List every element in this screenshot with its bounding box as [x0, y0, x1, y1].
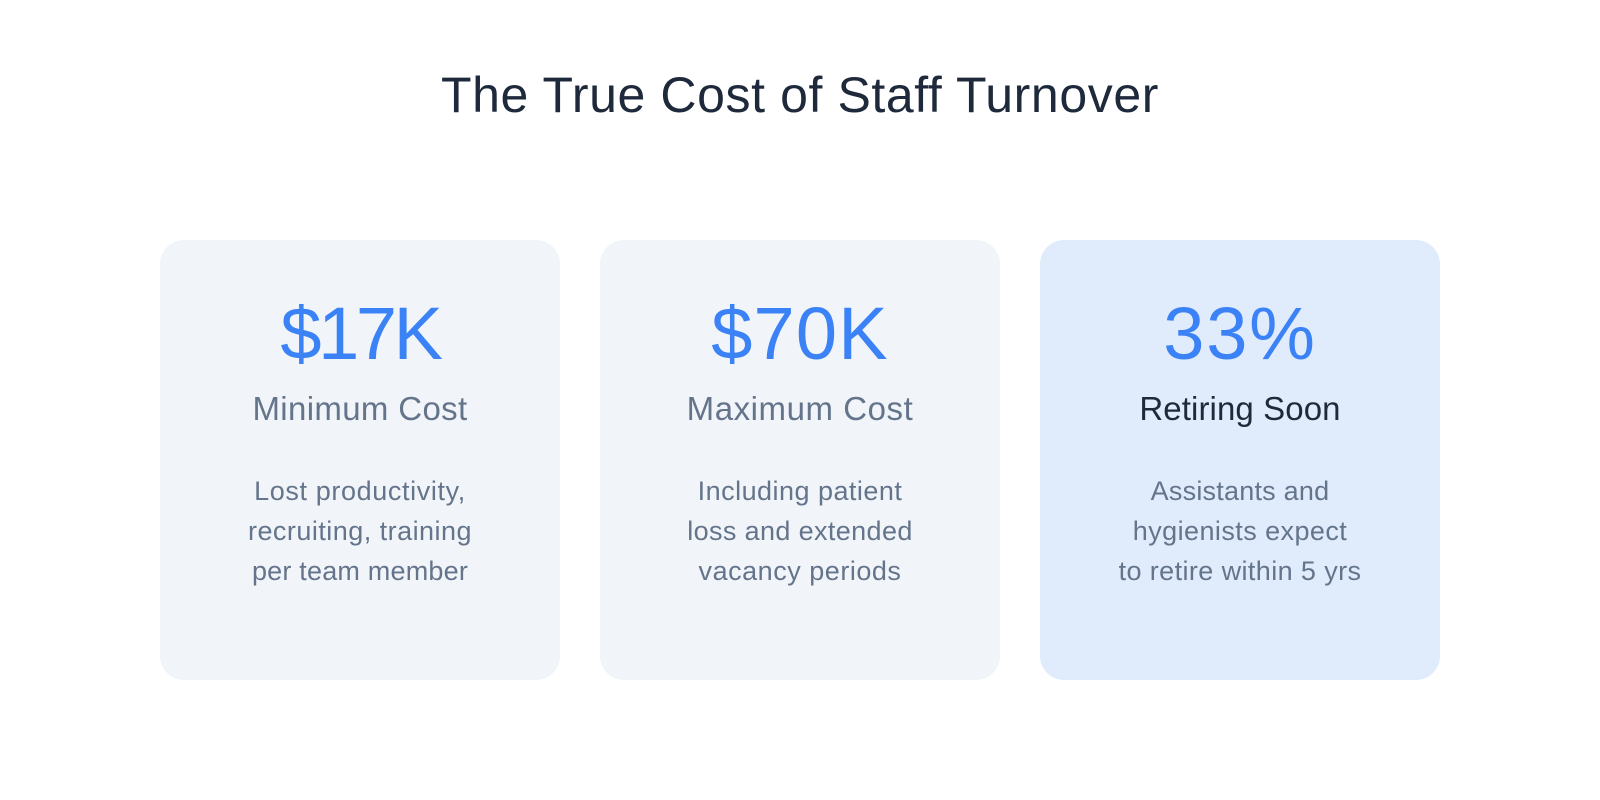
description: minimum cost: recruiting, training [248, 516, 472, 546]
description: maximum cost [687, 476, 913, 586]
description: minimum cost [248, 476, 472, 586]
description: maximum cost: loss and extended [687, 516, 913, 546]
statistic: 33%: 33% [1163, 292, 1317, 375]
panel: retiring soon [1040, 240, 1440, 680]
description: minimum cost: Lost productivity, [254, 476, 466, 506]
description: retiring soon: Assistants and [1151, 476, 1329, 506]
description: retiring soon: hygienists expect [1133, 516, 1347, 546]
label: minimum cost: Minimum Cost [252, 390, 468, 427]
label: maximum cost: Maximum Cost [687, 390, 913, 427]
label: retiring soon: Retiring Soon [1139, 390, 1341, 427]
description: retiring soon: to retire within 5 yrs [1119, 556, 1361, 586]
statistic: $17K: $17K [280, 292, 440, 375]
title: The True Cost of Staff Turnover [441, 67, 1159, 123]
description: maximum cost: Including patient [698, 476, 902, 506]
description: retiring soon [1119, 476, 1361, 586]
description: minimum cost: per team member [252, 556, 468, 586]
panel: minimum cost [160, 240, 560, 680]
panel: maximum cost [600, 240, 1000, 680]
description: maximum cost: vacancy periods [699, 556, 901, 586]
statistic: $70K: $70K [711, 292, 889, 375]
